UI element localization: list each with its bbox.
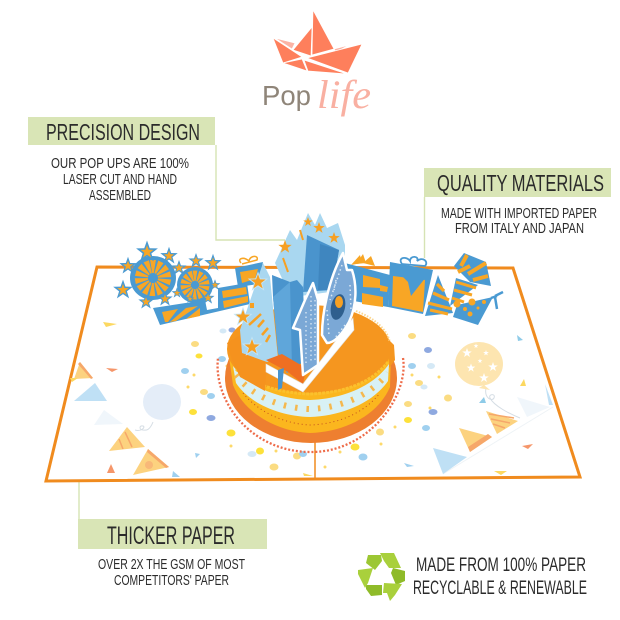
panel: open pop-up card [46,213,580,481]
orange stars: top [278,217,340,272]
hat: striped [425,275,453,316]
callout: precision design [28,117,215,204]
balloon: left [135,384,181,430]
connector lines [79,145,424,520]
wordmark: life: life [317,72,371,117]
number one [293,283,318,375]
cake side tab [389,340,395,368]
cake [227,305,395,433]
icon: origami boat [273,10,362,74]
gift: lower left [153,283,250,325]
white wall [266,318,354,392]
cake plate [225,313,397,443]
gift: right two [388,257,433,314]
firework: small [177,267,213,303]
scalloped rim [356,311,390,343]
scalloped edge [236,362,388,394]
wordmark: Pop: Pop [262,80,311,111]
left banner: fireworks and gifts [113,240,263,325]
heading: THICKER PAPER [107,522,235,550]
firework: large [130,256,176,300]
logo: Poplife [262,10,371,117]
dotted ring [218,358,404,452]
six counter [328,293,348,321]
description: LASER CUT AND HAND [63,172,177,188]
heading banner [424,168,611,197]
cake side lace [228,350,391,433]
description: OVER 2X THE GSM OF MOST [98,557,245,573]
cake top [227,305,391,393]
one dots [306,296,315,366]
hat: confetti cone [450,253,491,306]
light blue outline stars [233,271,270,356]
heading banner [28,117,215,145]
dark blue box: upper [303,235,339,292]
heading banner [78,519,267,549]
cake left flap [227,332,267,391]
card fold line [314,442,316,480]
firework stars [113,240,222,309]
icon: recycling arrows [358,553,405,601]
gift: upper left [235,256,263,287]
number six [322,253,355,343]
confetti [181,328,452,470]
six dots [327,265,351,338]
dark blue box: lower [272,275,306,373]
cake floor [266,354,306,384]
small triangles [103,322,533,476]
bunting: left [70,362,180,477]
description [51,156,189,204]
light blue panel: top fans [275,213,345,296]
pop-up structures [233,213,355,392]
blue box shade: lower [273,282,292,373]
text: recycled paper claim [413,554,587,599]
card sheet [46,267,580,481]
description [441,206,597,237]
balloon: right [455,342,520,418]
description: FROM ITALY AND JAPAN [455,221,584,237]
description: COMPETITORS' PAPER [114,573,229,589]
description [98,557,245,589]
description: ASSEMBLED [89,188,151,204]
callout: thicker paper [78,519,267,589]
light blue panel: stars left [240,263,278,362]
bunting: right [433,384,553,474]
description: OUR POP UPS ARE 100% [51,156,189,172]
callout: quality materials [424,168,611,237]
bow: orange [351,254,375,266]
gift: right one [345,263,390,307]
horn: dotted [453,292,503,325]
blue box shade: upper [318,244,339,290]
blue tab [278,368,284,390]
right banner: gifts and party hats [345,253,503,325]
heading: PRECISION DESIGN [46,119,200,145]
